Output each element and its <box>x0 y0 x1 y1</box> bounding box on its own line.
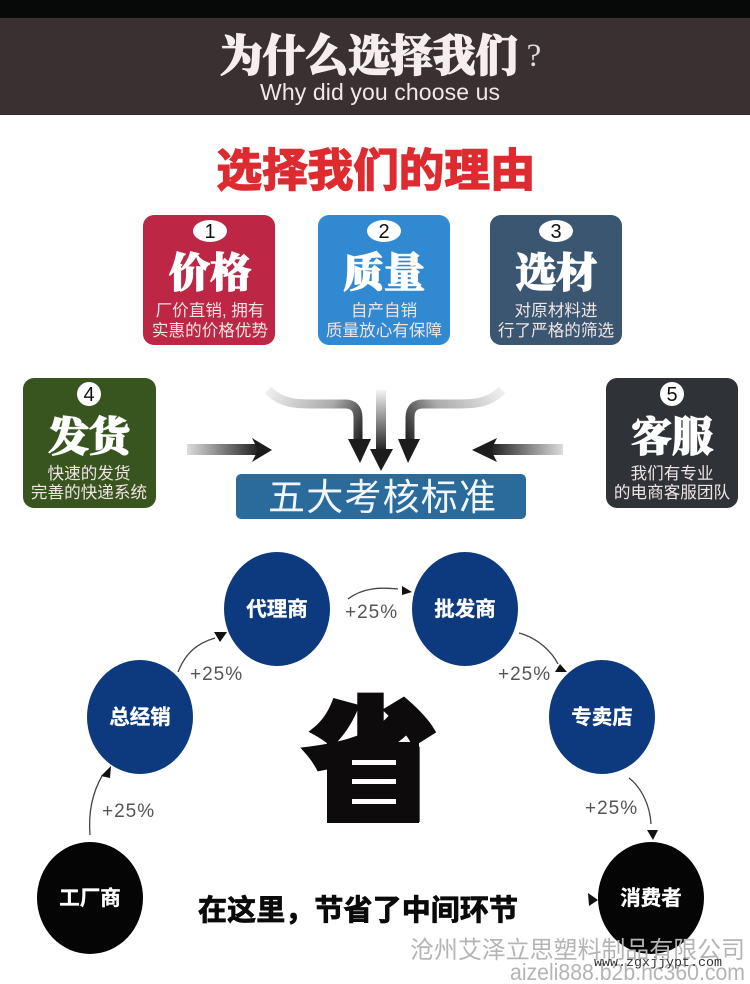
heading: quality: 质量 <box>343 250 425 296</box>
heading: shipping: 发货 <box>48 414 135 460</box>
panel: service <box>606 378 738 508</box>
node: factory: 工厂商 <box>59 887 121 910</box>
heading: service: 客服 <box>631 414 713 460</box>
node: consumer <box>598 842 704 954</box>
node: agent: 代理商 <box>246 598 308 621</box>
node: specialty store <box>549 660 655 774</box>
flow arrow 4: +25% <box>498 664 551 685</box>
description line 2: materials: 行了严格的筛选 <box>498 321 614 340</box>
node: wholesaler <box>412 552 518 666</box>
panel: price <box>143 215 275 345</box>
node: agent <box>224 552 330 666</box>
arrow: center down <box>370 390 393 471</box>
flow arrow 5 <box>585 778 658 840</box>
node: consumer: 消费者 <box>620 887 682 910</box>
description line 2: price: 实惠的价格优势 <box>152 321 268 340</box>
heading: materials: 选材 <box>515 250 597 296</box>
number badge 5: 5 <box>666 384 678 406</box>
watermark: company: 沧州艾泽立思塑料制品有限公司 <box>410 937 745 964</box>
description line 2: service: 的电商客服团队 <box>614 483 730 502</box>
flow arrow 4 <box>498 633 567 685</box>
panel: materials <box>490 215 622 345</box>
flow arrow 2: +25% <box>190 664 243 685</box>
description: price: 厂价直销, 拥有 <box>156 301 264 320</box>
banner text: 五大考核标准 <box>268 477 496 518</box>
header title: 为什么选择我们 <box>220 32 518 81</box>
description: shipping: 快速的发货 <box>48 464 130 483</box>
large character: save: 省 <box>307 658 435 843</box>
description line 2: shipping: 完善的快递系统 <box>31 483 147 502</box>
description: service: 我们有专业 <box>631 464 713 483</box>
panel: shipping <box>23 378 156 508</box>
node: specialty store: 专卖店 <box>571 706 633 729</box>
flow arrow 1 <box>90 766 155 835</box>
arrow: curved right <box>398 390 502 463</box>
flow arrow 5: +25% <box>585 798 638 819</box>
node: general distributor: 总经销 <box>109 706 171 729</box>
description: quality: 自产自销 <box>351 301 417 320</box>
arrow: from left <box>187 438 272 462</box>
standards banner <box>236 474 526 519</box>
node: general distributor <box>87 660 193 774</box>
header subtitle: Why did you choose us <box>260 79 500 105</box>
tagline: 在这里，节省了中间环节 <box>198 894 518 927</box>
question mark: ? <box>527 38 541 74</box>
node: factory <box>37 842 143 954</box>
watermark: site: www.zgxjjypt.com <box>594 955 722 970</box>
description line 2: quality: 质量放心有保障 <box>326 321 442 340</box>
flow arrow 3: +25% <box>345 602 398 623</box>
header band <box>0 0 750 115</box>
node: wholesaler: 批发商 <box>434 598 496 621</box>
arrow: from right <box>472 438 563 462</box>
red heading: 选择我们的理由 <box>216 145 536 196</box>
number badge 3: 3 <box>550 221 562 243</box>
number badge 4: 4 <box>83 384 95 406</box>
arrow: curved left <box>268 390 371 463</box>
number badge 2: 2 <box>378 221 390 243</box>
number badge 1: 1 <box>204 221 216 243</box>
flow arrow 1: +25% <box>102 801 155 822</box>
stray pointer <box>588 893 598 906</box>
flow arrow 2 <box>178 632 243 685</box>
flow arrow 3 <box>345 586 412 623</box>
panel: quality <box>318 215 450 345</box>
heading: price: 价格 <box>169 250 251 296</box>
description: materials: 对原材料进 <box>515 301 597 320</box>
